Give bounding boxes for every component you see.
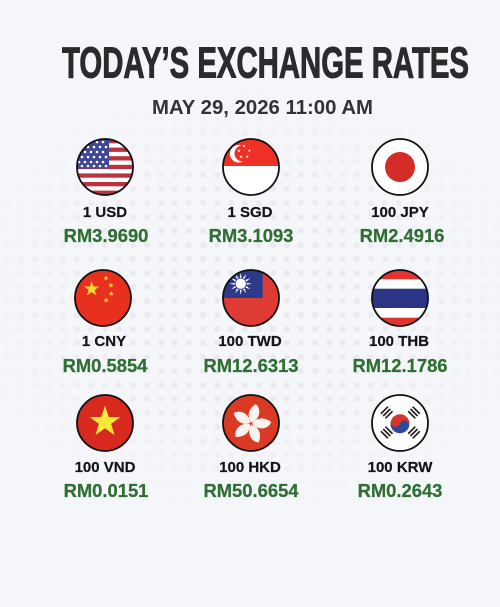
currency label: 100 JPY: [371, 204, 429, 221]
rate: CNY: [63, 270, 148, 376]
rate: THB: [352, 270, 448, 376]
rate: SGD: [209, 139, 293, 246]
rate value: RM12.6313: [203, 355, 299, 376]
date and time: MAY 29, 2026 11:00 AM: [152, 97, 373, 119]
currency label: 100 VND: [75, 459, 136, 476]
currency label: 100 KRW: [368, 459, 433, 476]
icon: US flag: [77, 139, 133, 195]
rate: USD: [64, 139, 148, 246]
currency label: 1 CNY: [82, 333, 126, 350]
rate: HKD: [203, 395, 299, 501]
currency label: 100 HKD: [219, 459, 281, 476]
rate value: RM0.0151: [64, 480, 148, 501]
icon: Hong Kong flag: [223, 395, 279, 451]
icon: South Korea flag: [372, 395, 428, 451]
rate value: RM3.1093: [209, 225, 293, 246]
rate value: RM3.9690: [64, 225, 148, 246]
rate value: RM2.4916: [360, 225, 444, 246]
rate: TWD: [203, 270, 299, 376]
rate: VND: [64, 395, 148, 501]
icon: Vietnam flag: [77, 395, 133, 451]
rate value: RM0.2643: [358, 480, 442, 501]
icon: Singapore flag: [223, 139, 279, 195]
rate: KRW: [358, 395, 442, 501]
currency label: 100 TWD: [218, 333, 282, 350]
rate: JPY: [360, 139, 444, 246]
rate value: RM12.1786: [352, 355, 448, 376]
icon: Taiwan flag: [223, 270, 279, 326]
currency label: 1 USD: [83, 204, 127, 221]
rate value: RM50.6654: [203, 480, 299, 501]
icon: Thailand flag: [372, 270, 428, 326]
currency label: 1 SGD: [227, 204, 273, 221]
currency label: 100 THB: [369, 333, 429, 350]
icon: China flag: [75, 270, 131, 326]
icon: Japan flag: [372, 139, 428, 195]
rate value: RM0.5854: [63, 355, 148, 376]
